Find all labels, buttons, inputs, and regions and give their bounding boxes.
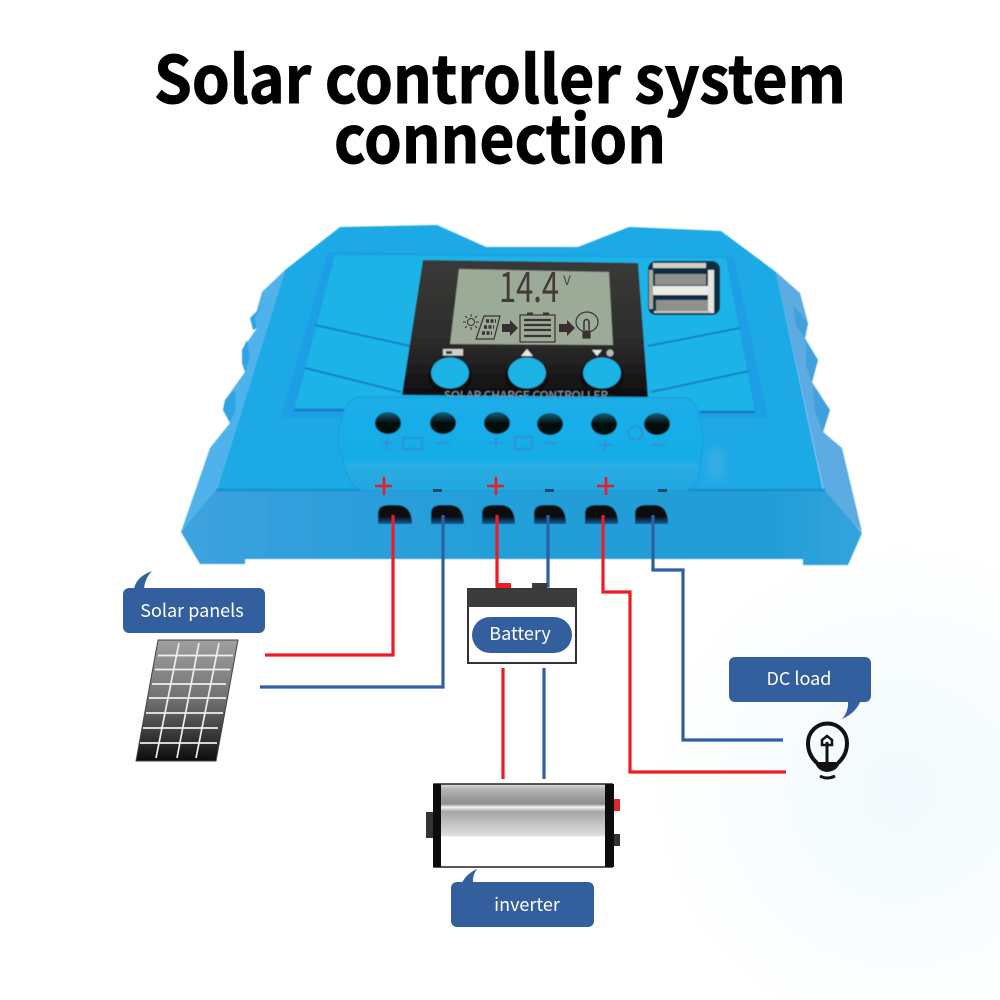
inverter (426, 784, 620, 867)
wire: solar positive (265, 515, 393, 655)
inverter tabs (426, 799, 620, 846)
recessed panel inner (294, 255, 755, 412)
battery lid (468, 589, 576, 607)
icon: light bulb (808, 724, 847, 778)
screw holes (375, 412, 670, 435)
icon: LCD solar panel (476, 316, 500, 339)
mottled highlight right of strip (707, 447, 725, 483)
wire: solar negative (260, 515, 443, 687)
title: connection (334, 88, 666, 182)
recessed panel frame (281, 252, 768, 418)
icon: arrow to bulb (559, 320, 575, 336)
battery label: Battery (489, 620, 551, 646)
LCD bezel (402, 260, 648, 397)
polarity marks (375, 477, 667, 495)
battery (468, 583, 576, 663)
wire entry holes (378, 505, 668, 524)
LCD icons (463, 312, 598, 342)
callout: DC load (729, 657, 871, 719)
wire: inverter negative (542, 668, 546, 779)
wire: load negative (653, 515, 783, 740)
inverter body (434, 784, 612, 867)
terminal strip (338, 397, 703, 491)
button symbols (443, 349, 614, 356)
LCD readout: V (563, 270, 571, 289)
bezel caption: SOLAR CHARGE CONTROLLER (444, 387, 608, 403)
embossed terminal symbols (382, 426, 666, 451)
button: right (580, 358, 624, 394)
battery terminals (496, 583, 547, 589)
icon: LCD bulb (576, 312, 598, 338)
panel grooves (294, 325, 755, 412)
callout: DC load: DC load (767, 665, 831, 691)
title (154, 28, 846, 182)
LCD screen (450, 269, 613, 345)
LCD readout: 14.4 (499, 254, 559, 315)
button: middle (505, 358, 549, 394)
battery body (468, 589, 576, 663)
inverter end caps (433, 784, 614, 867)
callout: inverter: inverter (494, 891, 561, 917)
plus marks (375, 477, 614, 495)
wire: load positive (603, 515, 786, 772)
icon: solar panel (136, 640, 238, 761)
title: Solar controller system (154, 28, 846, 122)
controller front face (181, 491, 862, 565)
callout: solar panels: Solar panels (140, 597, 244, 623)
wires (260, 515, 786, 779)
icon: LCD battery (520, 314, 555, 342)
button: left (428, 358, 472, 394)
controller top face (217, 225, 823, 490)
callout: inverter (451, 869, 594, 927)
solar charge controller device (181, 225, 862, 565)
callout: solar panels (123, 571, 265, 633)
front top edge (216, 489, 825, 491)
icon: sun (463, 314, 479, 330)
minus marks (433, 489, 667, 492)
wire: battery negative (540, 515, 548, 586)
controller side ridges (181, 270, 862, 532)
wire: battery positive (497, 515, 505, 586)
icon: arrow to battery (502, 320, 518, 336)
USB ports (648, 261, 720, 315)
wire: inverter positive (501, 668, 505, 779)
